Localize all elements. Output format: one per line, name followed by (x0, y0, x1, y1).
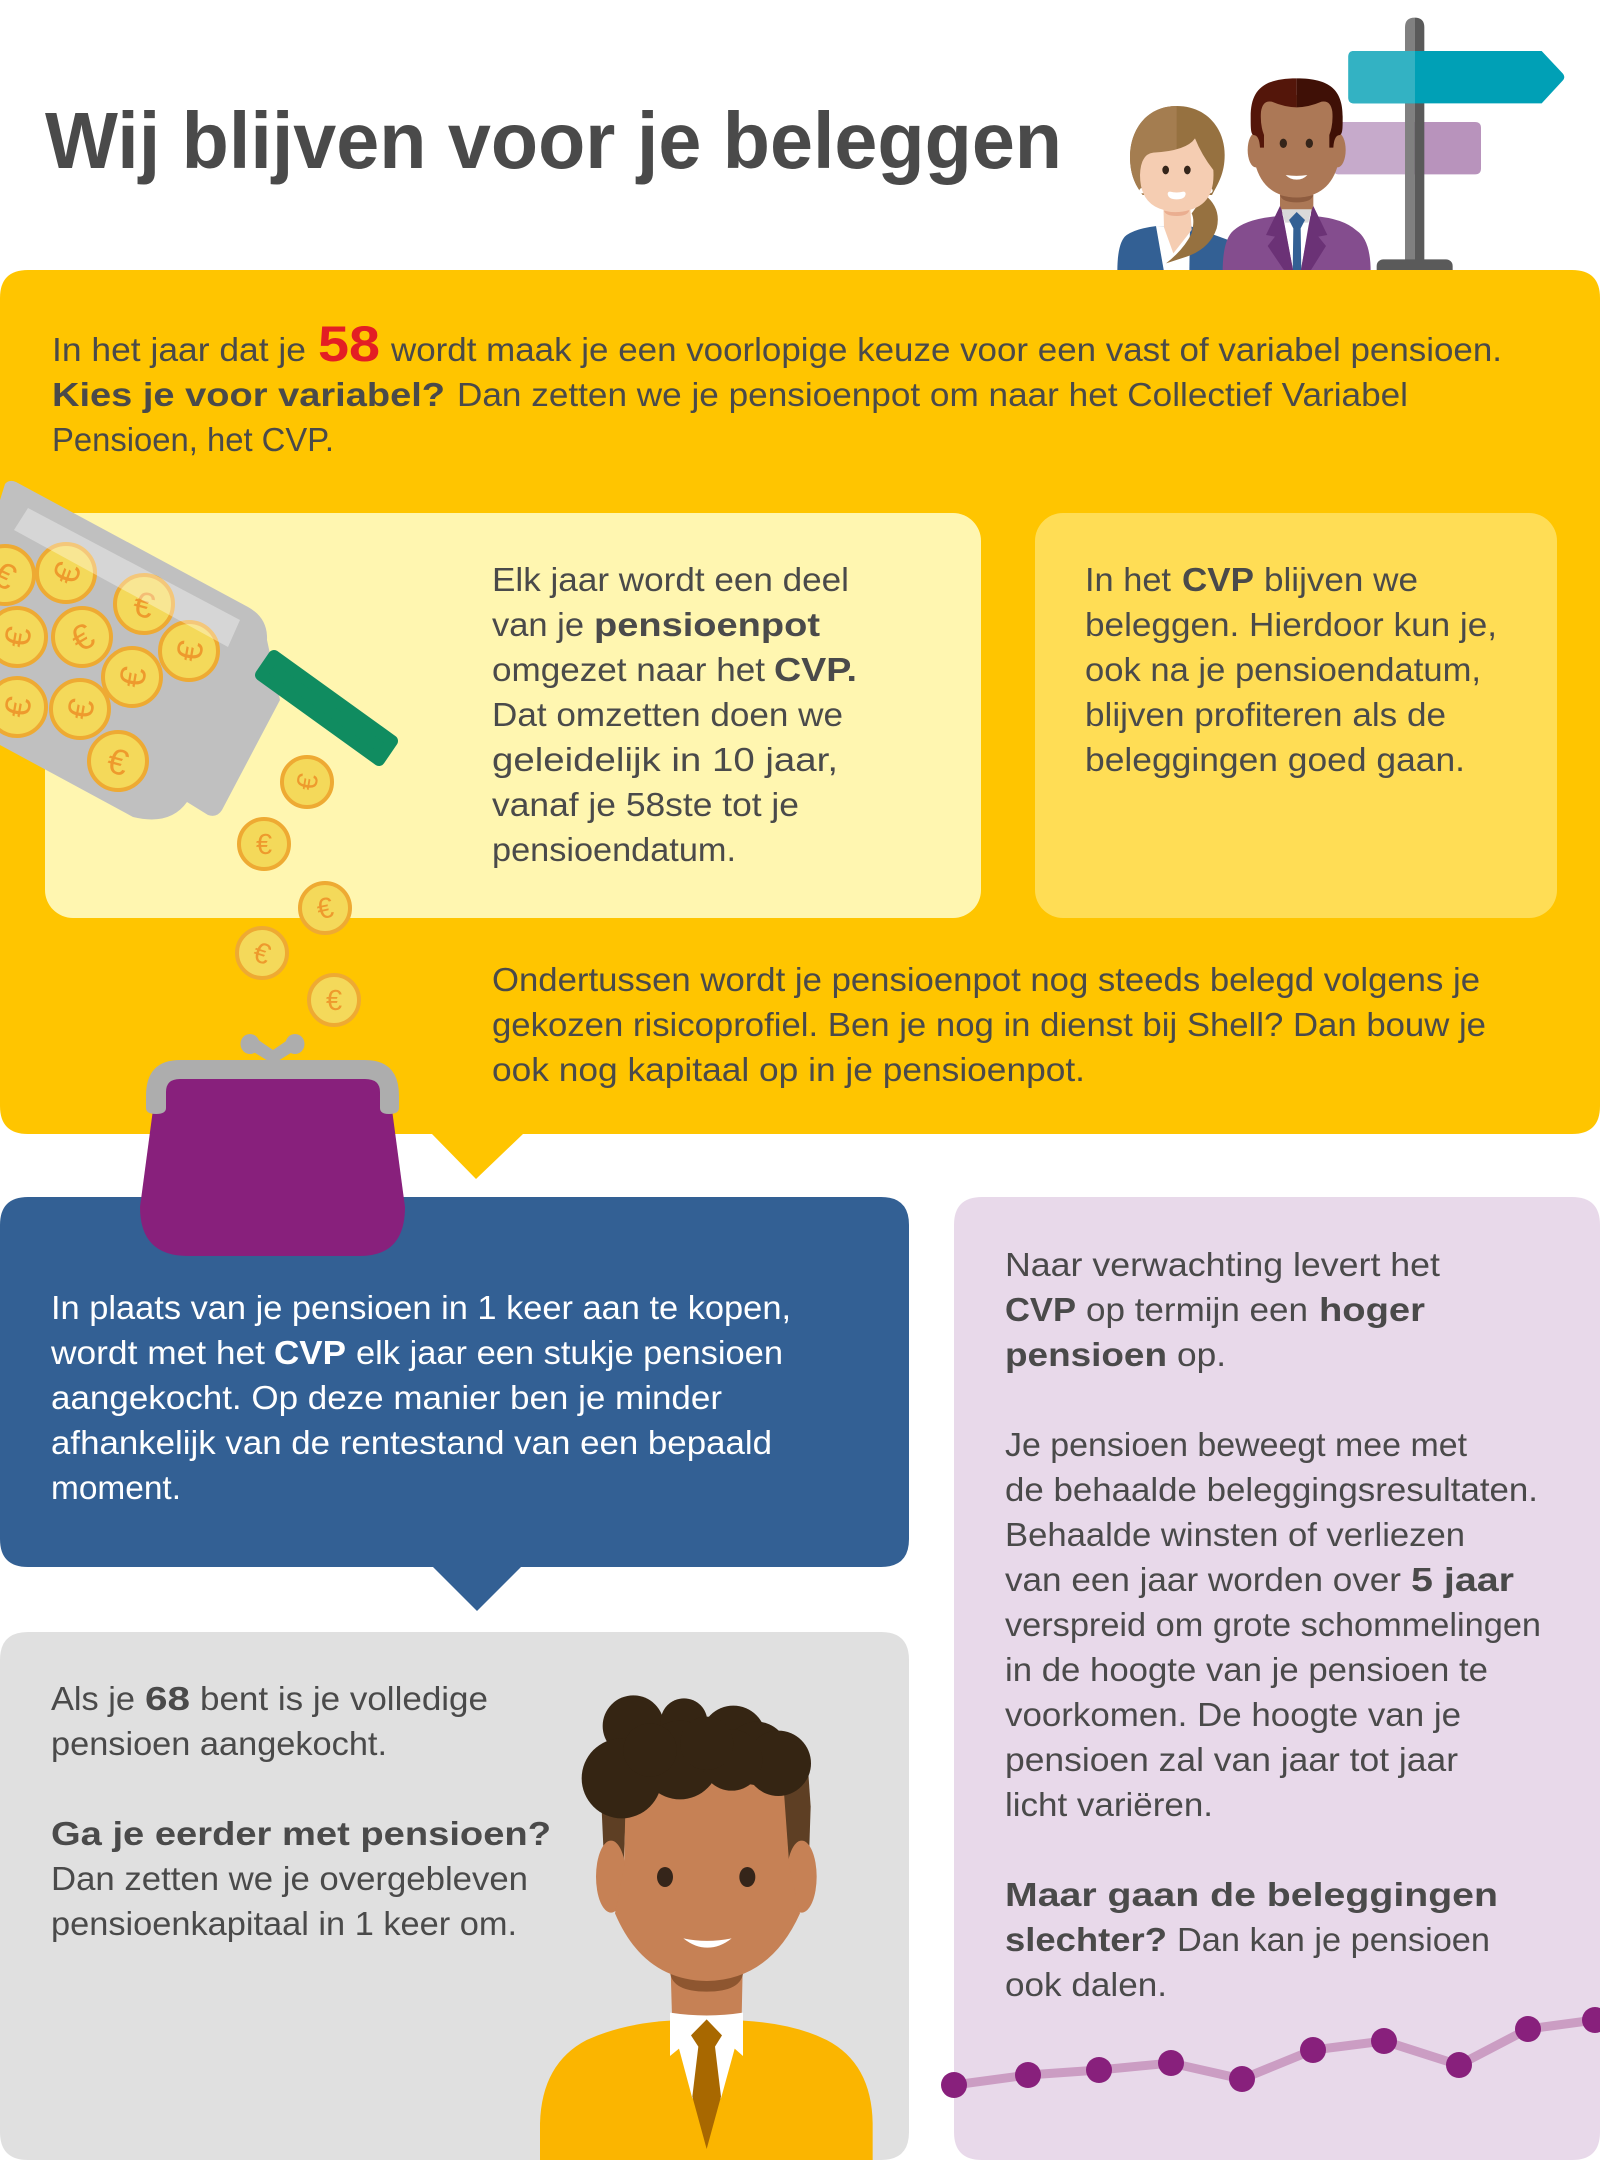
text: ondertussen: ook nog kapitaal op in je pensioenpot. (492, 1051, 1085, 1088)
text: ondertussen: Ondertussen wordt je pensioenpot nog steeds belegd volgens je (492, 961, 1480, 998)
text: keep investing: beleggen. Hierdoor kun je, (1085, 606, 1497, 643)
text: yearly conversion: pensioenpot (594, 606, 820, 643)
icon: man with curly hair (540, 1695, 873, 2160)
panel: purple expected outcome (941, 1197, 1600, 2160)
text: expected pension: verspreid om grote schommelingen (1005, 1606, 1541, 1643)
icon: tilted calculator with coins: € (168, 638, 211, 665)
text: annual purchase (50, 1289, 791, 1506)
icon: falling coins: € (326, 985, 342, 1017)
text: age 68: pensioen aangekocht. (51, 1725, 387, 1762)
icon: falling coins: € (314, 892, 336, 926)
text: age 68: Ga je eerder met pensioen? (51, 1815, 551, 1852)
text: expected pension: Maar gaan de beleggingen (1005, 1876, 1498, 1913)
text: expected pension: op termijn een (1086, 1291, 1308, 1328)
icon: tilted calculator with coins (0, 481, 280, 819)
text: expected pension: CVP (1005, 1291, 1076, 1328)
text: expected pension (1005, 1246, 1541, 2003)
text: annual purchase: aangekocht. Op deze manier ben je minder (51, 1379, 722, 1416)
text: expected pension: op. (1177, 1336, 1226, 1373)
text: expected pension: Dan kan je pensioen (1177, 1921, 1490, 1958)
icon: tilted calculator with coins: € (44, 557, 89, 590)
text: yearly conversion: Elk jaar wordt een deel (492, 561, 849, 598)
text: yearly conversion (492, 561, 857, 868)
text: expected pension: voorkomen. De hoogte van je (1005, 1696, 1461, 1733)
panel: light yellow conversion (45, 513, 981, 918)
text: expected pension: hoger (1319, 1291, 1425, 1328)
text: yearly conversion: CVP. (774, 651, 857, 688)
text: expected pension: de behaalde beleggingsresultaten. (1005, 1471, 1538, 1508)
coins inside calculator (0, 544, 218, 790)
icon: tilted calculator with coins: € (63, 615, 101, 660)
panel: yellow introduction (0, 270, 1600, 1179)
text: annual purchase: afhankelijk van de rentestand van een bepaald (51, 1424, 772, 1461)
title: Wij blijven voor je beleggen (45, 96, 1062, 185)
line chart (941, 2007, 1600, 2098)
icon: purple purse (140, 1034, 405, 1256)
text: keep investing: CVP (1182, 561, 1254, 598)
icon: falling coins (237, 757, 359, 1025)
text: keep investing: ook na je pensioendatum, (1085, 651, 1481, 688)
text: yearly conversion: vanaf je 58ste tot je (492, 786, 799, 823)
icon: tilted calculator with coins: € (129, 582, 159, 627)
text: age 68: 68 (145, 1680, 190, 1717)
text: annual purchase: wordt met het (50, 1334, 265, 1371)
text: expected pension: slechter? (1005, 1921, 1167, 1958)
text: expected pension: van een jaar worden over (1005, 1561, 1401, 1598)
icon: falling coins: € (291, 771, 325, 793)
icon: tilted calculator with coins: € (59, 696, 102, 723)
text: yearly conversion: omgezet naar het (492, 651, 765, 688)
text: keep investing: beleggingen goed gaan. (1085, 741, 1465, 778)
icon: tilted calculator with coins: € (111, 664, 154, 691)
panel: grey retirement at 68 (0, 1632, 909, 2160)
text: annual purchase: CVP (274, 1334, 346, 1371)
text: ondertussen (492, 961, 1486, 1088)
text: expected pension: in de hoogte van je pensioen te (1005, 1651, 1488, 1688)
intro text: Dan zetten we je pensioenpot om naar het Collectief Variabel (457, 376, 1408, 413)
text: yearly conversion: van je (492, 606, 584, 643)
icon: signpost (1333, 18, 1564, 279)
text: keep investing: blijven we (1264, 561, 1418, 598)
text: ondertussen: gekozen risicoprofiel. Ben je nog in dienst bij Shell? Dan bouw je (492, 1006, 1486, 1043)
text: annual purchase: moment. (51, 1469, 181, 1506)
text: annual purchase: In plaats van je pensioen in 1 keer aan te kopen, (51, 1289, 791, 1326)
text: expected pension: Naar verwachting levert het (1005, 1246, 1440, 1283)
intro text (52, 316, 1502, 458)
text: keep investing: blijven profiteren als de (1085, 696, 1446, 733)
intro text: In het jaar dat je (52, 331, 306, 368)
panel: blue annual purchase (0, 1197, 909, 1611)
icon: green calculator handle (261, 656, 392, 760)
text: keep investing: In het (1085, 561, 1171, 598)
intro text: 58 (318, 316, 380, 372)
icon: tilted calculator with coins: € (103, 739, 133, 784)
text: age 68: pensioenkapitaal in 1 keer om. (51, 1905, 517, 1942)
text: age 68: Als je (51, 1680, 135, 1717)
text: age 68: bent is je volledige (200, 1680, 488, 1717)
text: yearly conversion: geleidelijk in 10 jaar, (492, 741, 838, 778)
text: expected pension: ook dalen. (1005, 1966, 1167, 2003)
text: expected pension: 5 jaar (1411, 1561, 1514, 1598)
intro text: wordt maak je een voorlopige keuze voor een vast of variabel pensioen. (390, 331, 1502, 368)
text: expected pension: pensioen (1005, 1336, 1167, 1373)
text: expected pension: pensioen zal van jaar tot jaar (1005, 1741, 1458, 1778)
panel: CVP investing (1035, 513, 1557, 918)
text: age 68: Dan zetten we je overgebleven (51, 1860, 528, 1897)
icon: man in purple suit (1223, 78, 1371, 272)
text: annual purchase: elk jaar een stukje pensioen (356, 1334, 783, 1371)
text: yearly conversion: pensioendatum. (492, 831, 736, 868)
text: keep investing (1085, 561, 1497, 778)
text: expected pension: licht variëren. (1005, 1786, 1213, 1823)
icon: falling coins: € (249, 936, 274, 972)
intro text: Kies je voor variabel? (52, 376, 445, 413)
icon: woman (1117, 106, 1228, 272)
icon: falling coins: € (256, 829, 272, 861)
text: yearly conversion: Dat omzetten doen we (492, 696, 843, 733)
text: age 68 (51, 1680, 551, 1942)
text: expected pension: Je pensioen beweegt mee met (1005, 1426, 1467, 1463)
intro text: Pensioen, het CVP. (52, 421, 334, 458)
illustration: two colleagues and signpost (1117, 18, 1564, 279)
text: expected pension: Behaalde winsten of verliezen (1005, 1516, 1465, 1553)
